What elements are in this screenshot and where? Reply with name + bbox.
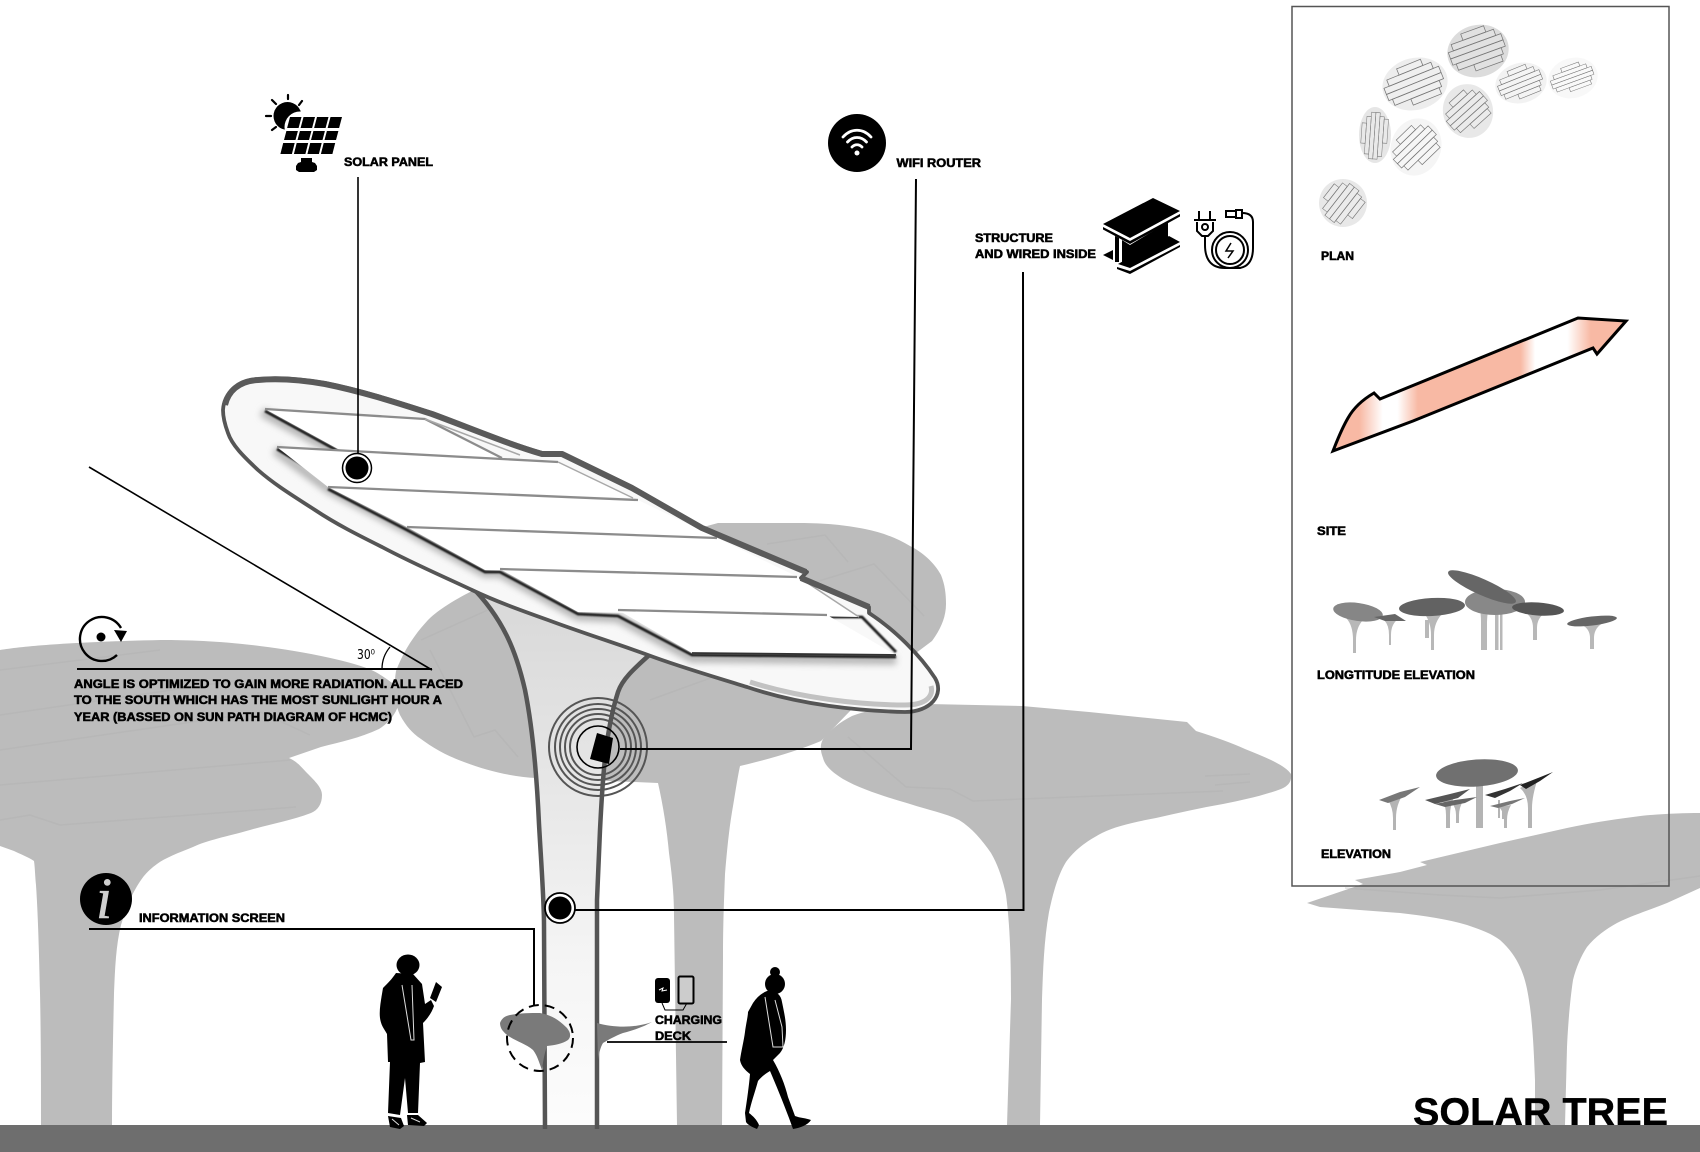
leader line: charging deck: [607, 1041, 727, 1043]
background tree: left: [0, 640, 400, 1126]
title: SOLAR TREE: [1413, 1091, 1668, 1134]
label: structure and wired inside: AND WIRED INSIDE: [975, 247, 1096, 261]
label: longtitude elevation: LONGTITUDE ELEVATION: [1317, 668, 1475, 682]
canopy rim: [223, 378, 938, 712]
label: wifi router: WIFI ROUTER: [896, 156, 981, 170]
solar tree: canopy with solar panels: [223, 378, 938, 712]
leader line: wifi: [620, 179, 916, 749]
site arrow: [1333, 318, 1626, 451]
leader line: information screen: [89, 929, 534, 1006]
label: solar panel: SOLAR PANEL: [344, 155, 433, 169]
wifi signal rings and router: [549, 698, 647, 796]
background tree: center: [395, 523, 946, 1125]
label: structure and wired inside: [975, 231, 1096, 261]
text block: angle explanation: [74, 677, 463, 724]
label: charging deck: CHARGING: [655, 1013, 722, 1027]
leader line: solar panel: [342, 177, 372, 482]
person reading phone: [380, 954, 442, 1129]
icon: wifi router: [828, 114, 886, 172]
background tree: far right: [1307, 813, 1700, 1125]
angle diagram: [77, 467, 432, 670]
label: site: SITE: [1317, 524, 1346, 538]
plan drawing: [1315, 18, 1602, 230]
label: charging deck: DECK: [655, 1029, 691, 1043]
label: structure and wired inside: STRUCTURE: [975, 231, 1053, 245]
angle diagram: 30⁰: [357, 648, 375, 663]
information screen leaf: [500, 1005, 573, 1071]
label: information screen: INFORMATION SCREEN: [139, 911, 285, 925]
panel shadows: [265, 411, 896, 657]
ground: [0, 1125, 1700, 1152]
leader line: structure: [545, 272, 1024, 923]
label: charging deck: [655, 1013, 722, 1043]
text block: angle explanation: ANGLE IS OPTIMIZED TO GAIN MORE RADIATION. ALL FACED: [74, 677, 463, 691]
label: plan: PLAN: [1321, 249, 1354, 263]
icon: steel i-beam: [1103, 198, 1180, 274]
text block: angle explanation: TO THE SOUTH WHICH HAS THE MOST SUNLIGHT HOUR A: [74, 693, 442, 707]
icon: information: [80, 866, 132, 931]
charging deck leaf: [597, 1022, 652, 1060]
elevation drawing: [1379, 757, 1553, 830]
background tree: right: [821, 704, 1291, 1125]
solar panels: [265, 409, 896, 655]
icon: plug and cable: [1194, 210, 1253, 268]
solar tree: stem: [470, 585, 655, 1129]
icon: charging: [655, 976, 694, 1010]
person walking: [740, 967, 811, 1129]
longitude elevation drawing: [1332, 565, 1617, 653]
label: elevation: ELEVATION: [1321, 847, 1391, 861]
icon: solar panel: [266, 95, 342, 172]
panel: overview frame: [1292, 6, 1669, 886]
icon: rotation: [80, 617, 127, 661]
icon: information: i: [96, 866, 112, 931]
text block: angle explanation: YEAR (BASSED ON SUN PATH DIAGRAM OF HCMC): [74, 710, 392, 724]
